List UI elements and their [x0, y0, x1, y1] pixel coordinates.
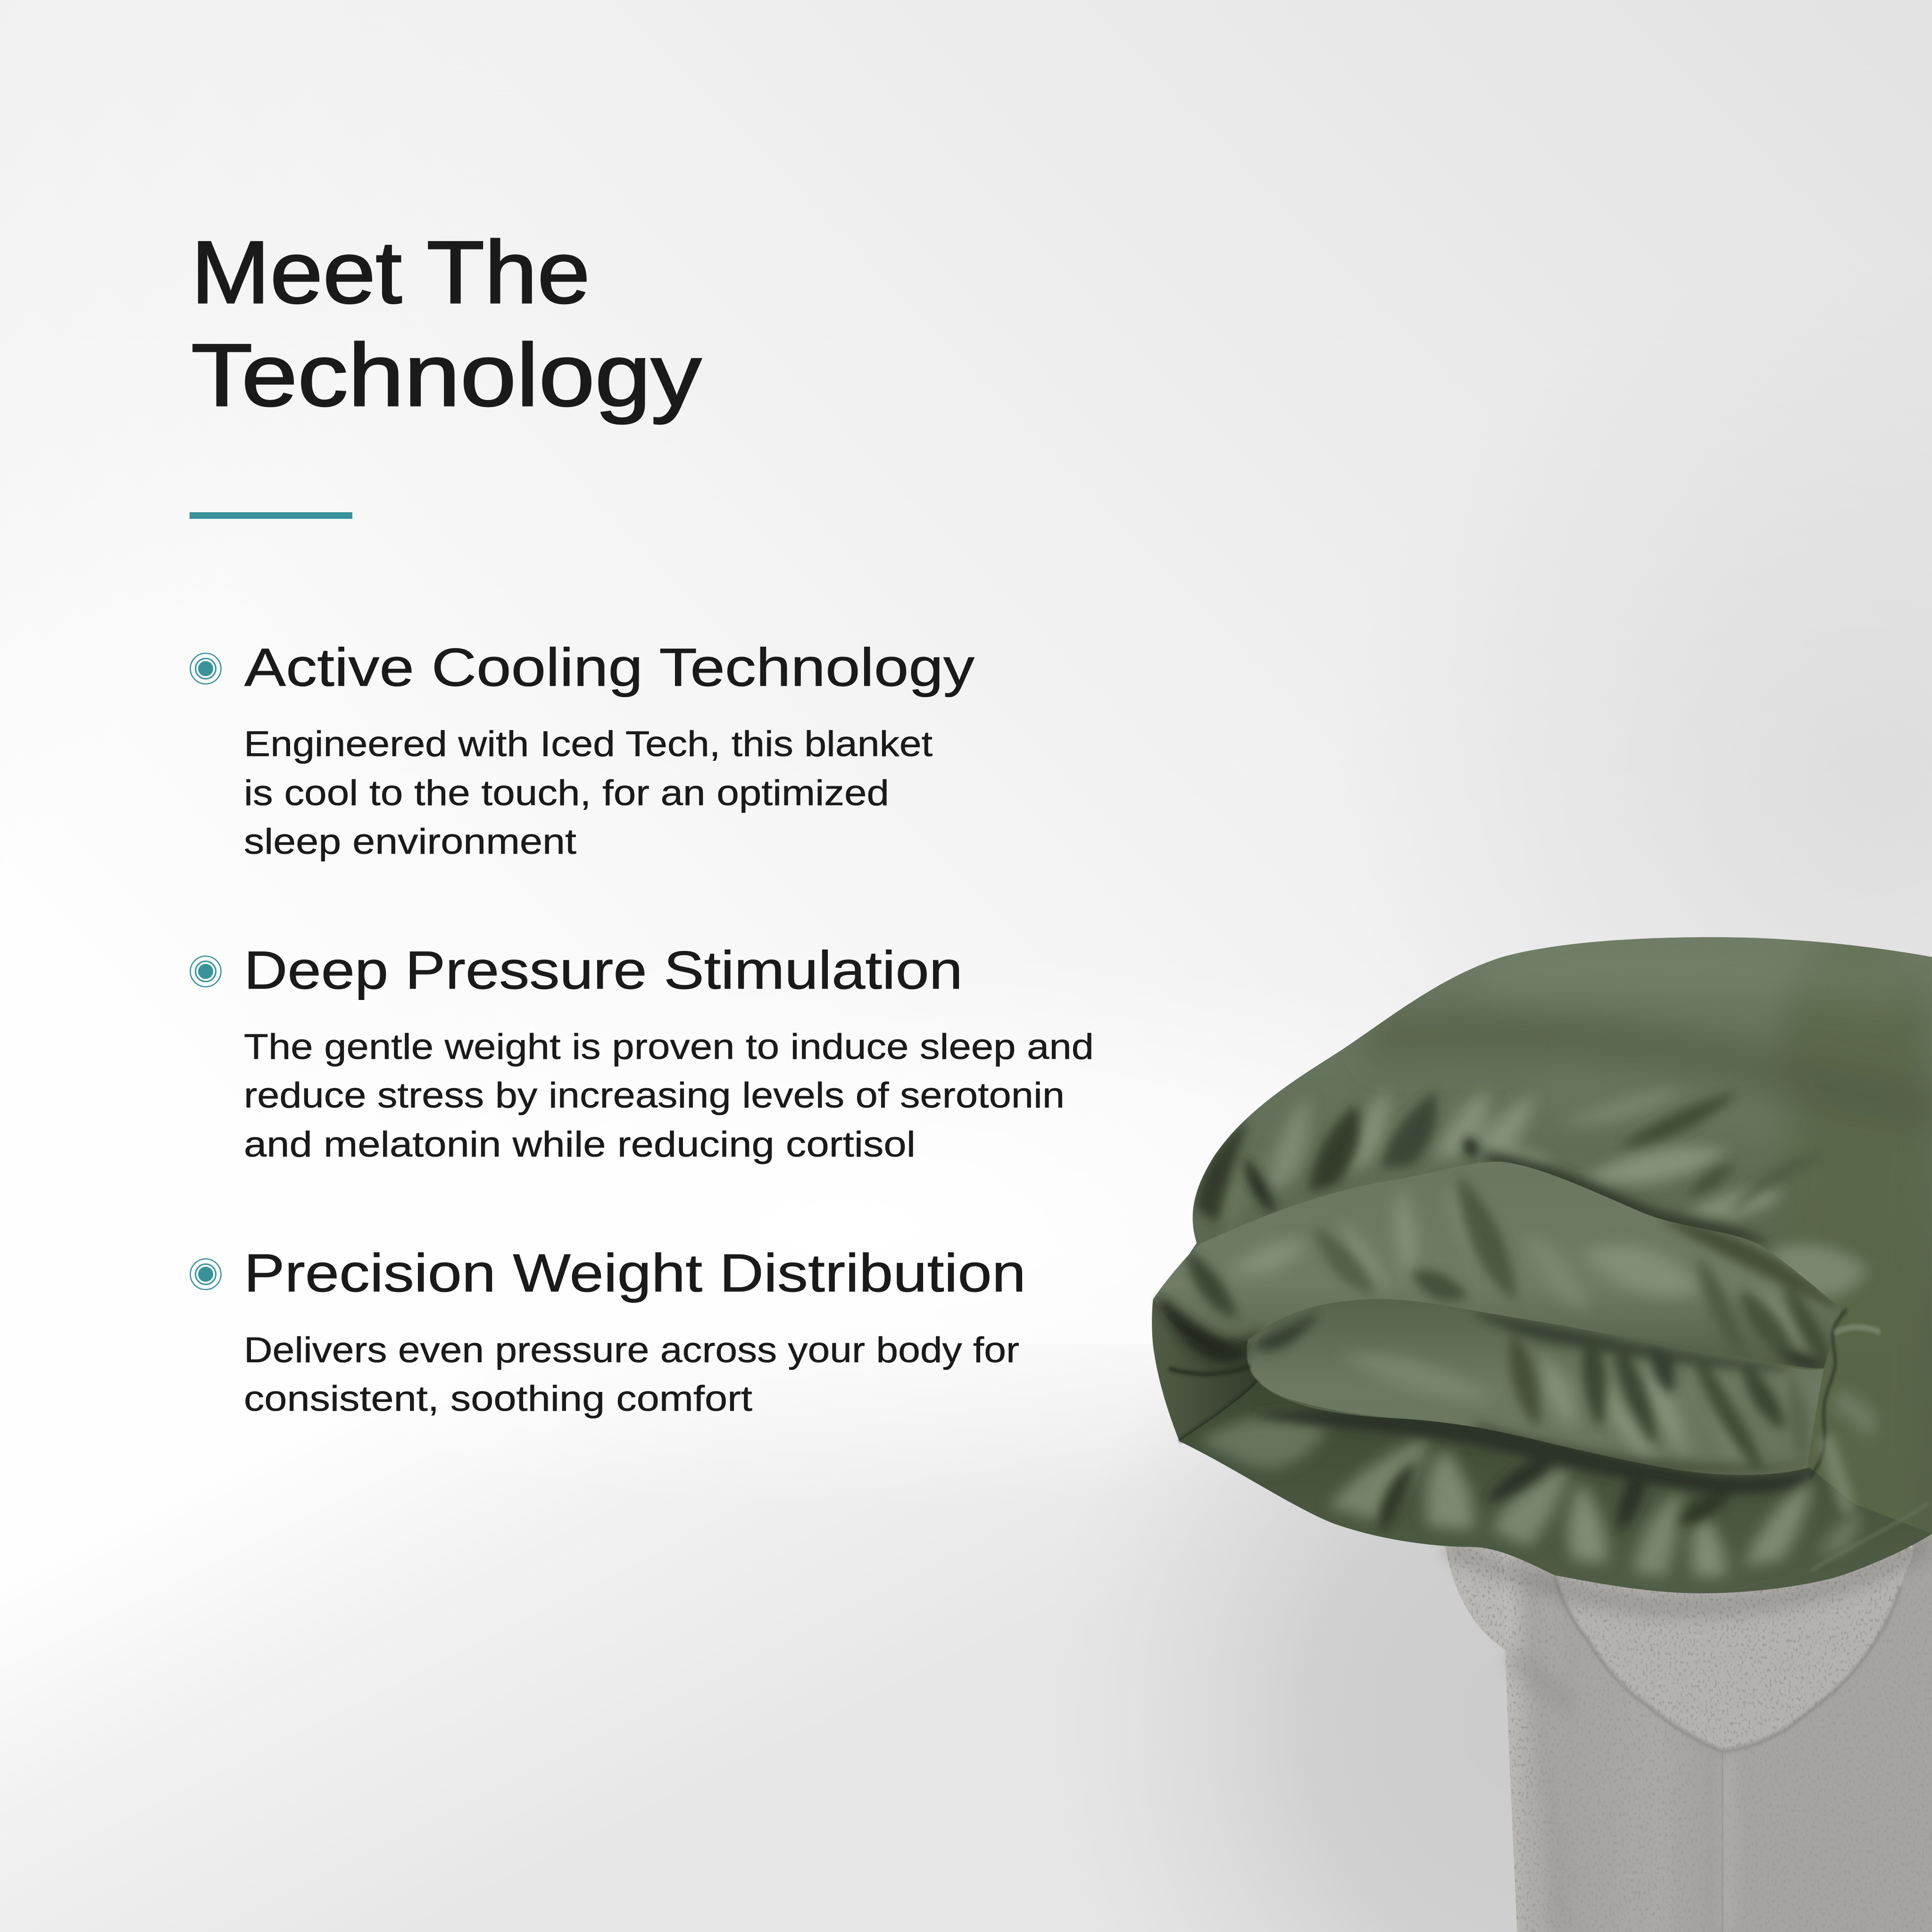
fold shadows — [1258, 1412, 1812, 1530]
blanket right wrap — [1811, 1310, 1928, 1570]
dark creases — [1198, 1094, 1817, 1243]
roll highlights — [1229, 1180, 1812, 1355]
heading: Deep Pressure Stimulation — [244, 941, 963, 1000]
body text: Delivers even pressure across your body for — [244, 1330, 1019, 1370]
feature: precision weight — [191, 1243, 1026, 1419]
soft dome shading — [1382, 968, 1932, 1557]
fold highlights — [1198, 1415, 1860, 1577]
title — [191, 223, 701, 425]
feature: deep pressure — [191, 941, 1094, 1165]
stand shading — [1445, 1543, 1932, 1932]
satin highlights — [1214, 1088, 1867, 1297]
body text — [244, 1330, 1019, 1419]
body text: reduce stress by increasing levels of serotonin — [244, 1075, 1065, 1116]
teal accent rule — [190, 512, 352, 519]
blanket lower roll — [1248, 1302, 1824, 1475]
icon: target bullet — [191, 1259, 221, 1290]
body text: sleep environment — [244, 822, 576, 862]
blanket upper roll — [1153, 1162, 1841, 1368]
left column — [1500, 1540, 1727, 1932]
body text: consistent, soothing comfort — [244, 1379, 752, 1419]
heading: Precision Weight Distribution — [244, 1243, 1026, 1303]
left bump — [1445, 1540, 1529, 1650]
feature: active cooling — [191, 638, 974, 862]
blanket left end — [1152, 1299, 1258, 1441]
body text: The gentle weight is proven to induce sleep and — [244, 1027, 1094, 1067]
roll highlights — [1340, 1352, 1739, 1467]
icon: target bullet — [191, 653, 221, 684]
blanket top layer folds — [1198, 968, 1932, 1557]
right column — [1723, 1530, 1932, 1932]
roll shadows — [1256, 1314, 1807, 1472]
head form — [1553, 1547, 1914, 1751]
blanket base shape — [1152, 937, 1932, 1593]
icon: target bullet — [191, 956, 221, 987]
title: Meet The — [191, 223, 590, 322]
product image: blanket on concrete stand — [1152, 937, 1932, 1932]
body text — [244, 724, 933, 862]
body text: and melatonin while reducing cortisol — [244, 1124, 916, 1165]
concrete stand — [1445, 1530, 1932, 1932]
title: Technology — [191, 325, 701, 425]
body text — [244, 1027, 1094, 1165]
heading: Active Cooling Technology — [244, 638, 974, 698]
blanket bottom layer — [1179, 1382, 1932, 1593]
roll shadows — [1156, 1180, 1841, 1368]
body text: is cool to the touch, for an optimized — [244, 773, 889, 813]
body text: Engineered with Iced Tech, this blanket — [244, 724, 933, 764]
